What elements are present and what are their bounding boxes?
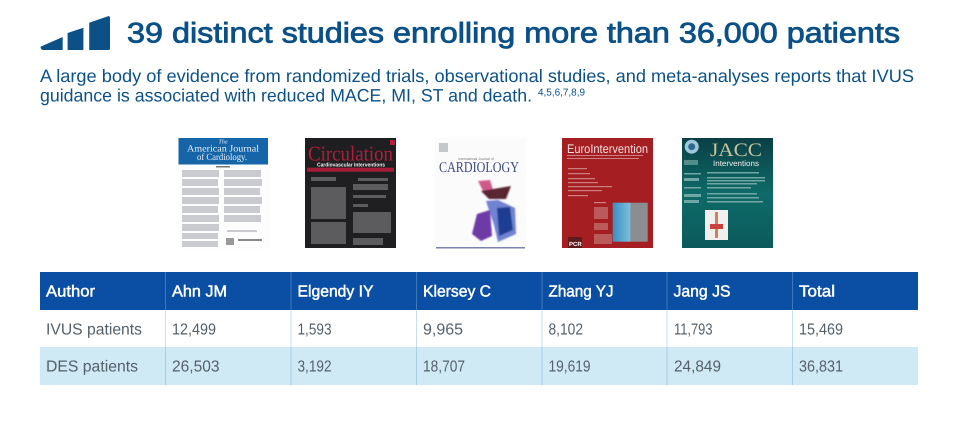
journal cover: International Journal of Cardiology: International Journal of <box>458 157 494 161</box>
table header row: Total <box>799 284 835 301</box>
table header row: Jang JS <box>674 284 730 301</box>
table <box>40 272 918 385</box>
table header row: Author <box>46 284 96 301</box>
table row: DES patients <box>40 347 918 385</box>
table row: IVUS patients: 8,102 <box>548 321 583 338</box>
intro text: A large body of evidence from randomized trials, observational studies, and meta-analyses reports that IVUS <box>40 66 914 86</box>
table row: DES patients: 24,849 <box>674 359 721 376</box>
journal cover: Circulation <box>305 138 396 248</box>
journal cover: EuroIntervention: EuroIntervention <box>567 142 648 156</box>
table row: IVUS patients: 12,499 <box>172 321 216 338</box>
table row: DES patients: 18,707 <box>423 359 465 376</box>
table row: DES patients: 36,831 <box>799 359 843 376</box>
citation references: 4,5,6,7,8,9 <box>538 88 585 98</box>
table row: IVUS patients: IVUS patients <box>46 321 142 338</box>
table header row: Klersey C <box>423 284 491 301</box>
journal cover: Circulation: Circulation <box>308 142 393 166</box>
table row: DES patients: 19,619 <box>548 359 591 376</box>
table row: IVUS patients <box>46 321 843 338</box>
table row: IVUS patients: 9,965 <box>423 321 463 338</box>
table header row: Elgendy IY <box>298 284 374 301</box>
journal cover: JACC Interventions <box>682 138 773 248</box>
table header row: Ahn JM <box>172 284 227 301</box>
table row: DES patients: DES patients <box>46 359 138 376</box>
journal cover: International Journal of Cardiology <box>435 138 526 249</box>
journal cover: American Journal of Cardiology <box>178 138 270 249</box>
title: 39 distinct studies enrolling more than 36,000 patients <box>127 17 900 49</box>
journal cover: EuroIntervention <box>562 138 653 248</box>
table row: IVUS patients: 1,593 <box>298 321 332 338</box>
intro text: guidance is associated with reduced MACE, MI, ST and death. <box>40 86 532 106</box>
journal cover: American Journal of Cardiology: of Cardiology. <box>197 153 247 163</box>
journal cover: JACC Interventions: Interventions <box>713 159 759 168</box>
table header row: Zhang YJ <box>548 284 614 301</box>
journal cover: Circulation: Cardiovascular Interventions <box>317 163 385 169</box>
intro text <box>40 66 914 106</box>
table row: DES patients: 26,503 <box>172 359 220 376</box>
table row: IVUS patients: 15,469 <box>799 321 843 338</box>
icon: rising bars <box>40 16 110 50</box>
table row: IVUS patients: 11,793 <box>674 321 713 338</box>
journal cover: EuroIntervention: PCR <box>569 241 582 248</box>
journal cover: JACC Interventions: JACC <box>710 140 762 161</box>
journal cover: American Journal of Cardiology: The <box>218 138 228 146</box>
journal cover: American Journal of Cardiology: American Journal <box>187 145 259 155</box>
journal cover: International Journal of Cardiology: CARDIOLOGY <box>439 160 519 176</box>
table header row <box>40 272 918 310</box>
table row: DES patients: 3,192 <box>298 359 332 376</box>
